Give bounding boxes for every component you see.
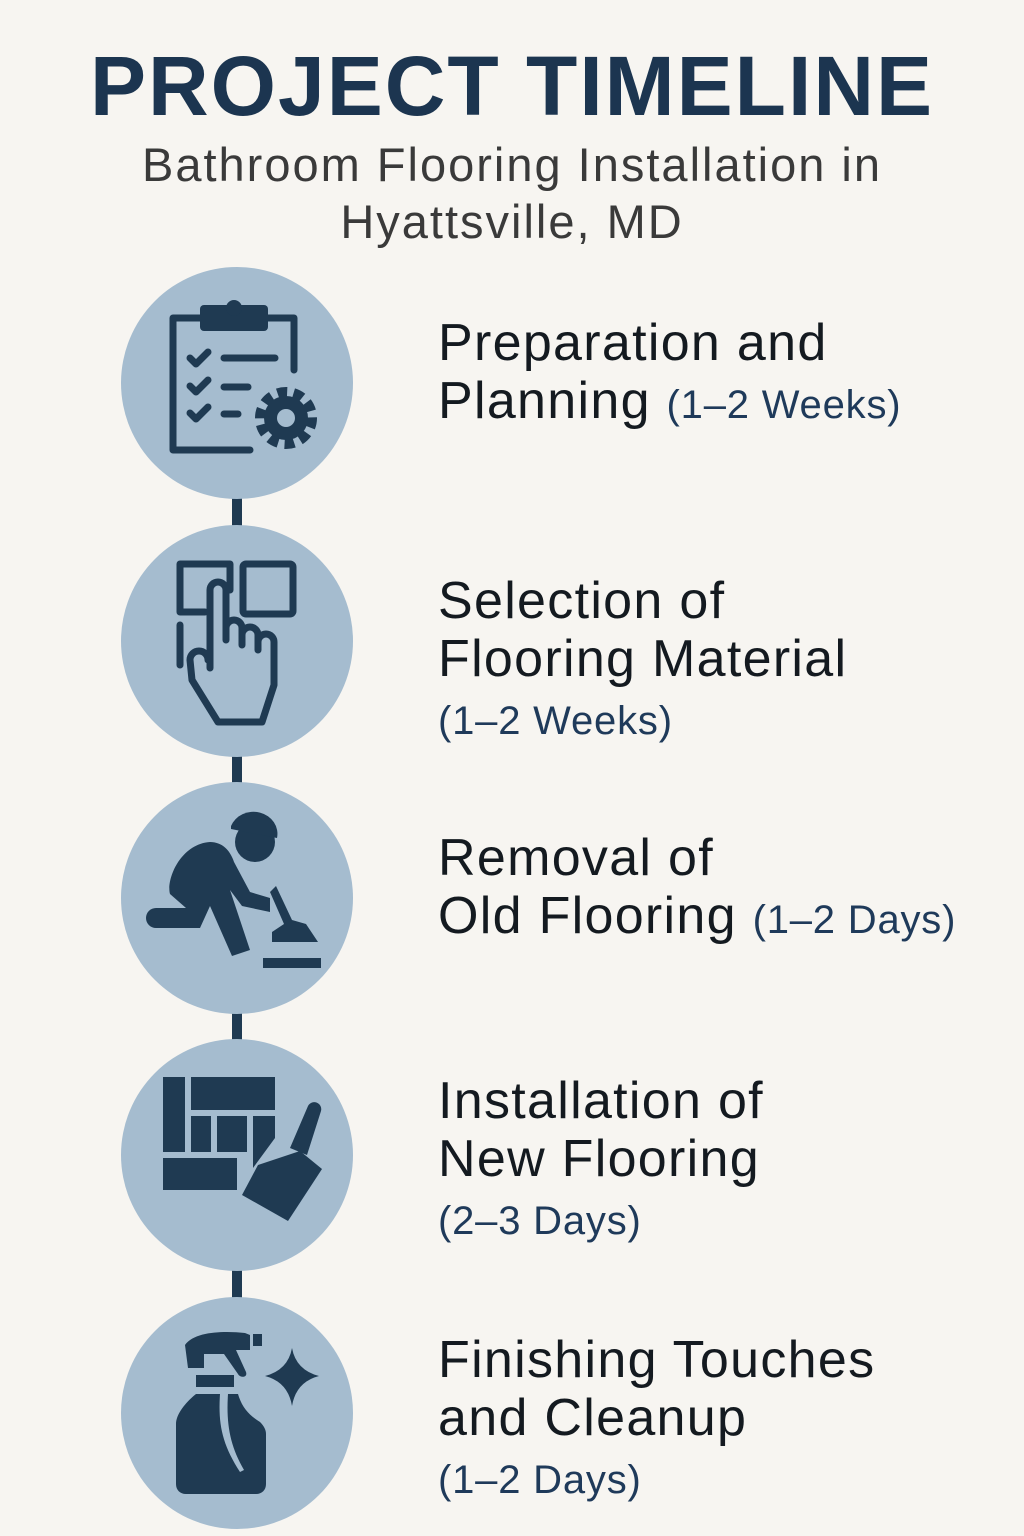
step 4 text: Installation of	[438, 1072, 764, 1130]
step 2 text: Selection of	[438, 572, 725, 630]
step 5 text: Finishing Touches	[438, 1331, 875, 1389]
step 3 text	[438, 829, 956, 945]
subtitle: Hyattsville, MD	[340, 195, 684, 248]
step 4 text: New Flooring	[438, 1130, 760, 1188]
step 3 text: Removal of	[438, 829, 714, 887]
step 2 text: Flooring Material	[438, 630, 847, 688]
step 5 text	[438, 1331, 875, 1502]
step 2 text: (1–2 Weeks)	[438, 699, 673, 743]
subtitle	[142, 138, 882, 248]
step 5 text: (1–2 Days)	[438, 1458, 642, 1502]
step 2 text	[438, 572, 847, 743]
icon: tiles and trowel	[121, 1039, 353, 1271]
step 3 text: Old Flooring (1–2 Days)	[438, 887, 956, 945]
subtitle: Bathroom Flooring Installation in	[142, 138, 882, 191]
step 5 text: and Cleanup	[438, 1389, 747, 1447]
icon: spray bottle	[121, 1297, 353, 1529]
title: PROJECT TIMELINE	[90, 39, 934, 133]
step 1 text: Planning (1–2 Weeks)	[438, 372, 901, 430]
connector line	[232, 480, 242, 1380]
icon: worker removing floor	[121, 782, 353, 1014]
step 4 text: (2–3 Days)	[438, 1199, 642, 1243]
icon: selection hand	[121, 525, 353, 757]
icon: clipboard checklist	[121, 267, 353, 499]
step 1 text: Preparation and	[438, 314, 828, 372]
step 4 text	[438, 1072, 764, 1243]
step 1 text	[438, 314, 901, 430]
